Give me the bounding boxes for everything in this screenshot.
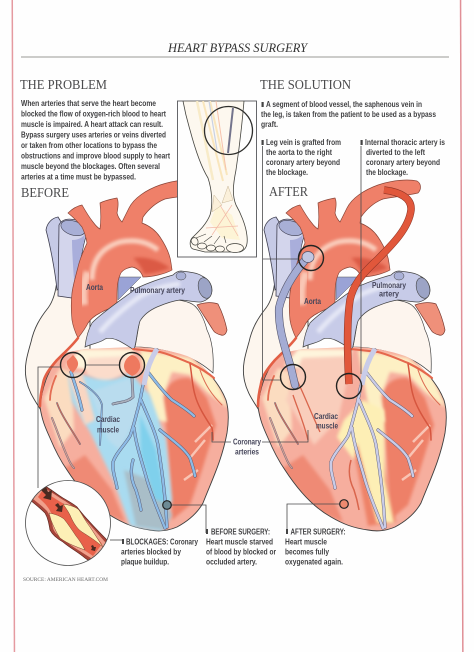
after: reoxygenated muscle [286, 356, 396, 526]
label: cardiac muscle before [96, 415, 120, 434]
blockage: blood-flow arrows [41, 487, 96, 551]
label: after surgery [285, 526, 346, 566]
text block: leg vein note: the blockage. [266, 167, 308, 177]
text block: problem description: When arteries that serve the heart become [21, 98, 156, 108]
label: cardiac muscle before: muscle [97, 426, 119, 434]
before: oxygen-starved blue zone [68, 356, 172, 532]
label: before surgery: Heart muscle starved [206, 536, 273, 546]
title: HEART BYPASS SURGERY [167, 41, 309, 55]
text block: internal thoracic artery note: coronary artery beyond [366, 157, 440, 167]
text block: internal thoracic artery note: diverted to the left [366, 147, 425, 157]
label: pulmonary artery after [372, 281, 406, 298]
text block: problem description: muscle is impaired. A heart attack can result. [21, 119, 163, 129]
label: cardiac muscle after: Cardiac [314, 412, 338, 421]
label: cardiac muscle after [314, 412, 338, 430]
heading: after: AFTER [269, 185, 309, 200]
heading: before: BEFORE [21, 186, 69, 201]
label: pulmonary artery after: Pulmonary [372, 281, 406, 290]
label: pulmonary artery after: artery [379, 290, 399, 298]
label: aorta after: Aorta [304, 297, 321, 306]
label: blockages: arteries blocked by [121, 546, 181, 556]
text block: leg vein note [262, 137, 341, 177]
label: after surgery: AFTER SURGERY: [290, 526, 346, 536]
text block: solution description: graft. [261, 119, 278, 129]
left page border line [12, 0, 15, 652]
magnifier circles: after grafts [280, 246, 362, 398]
blockage detail circle [26, 480, 110, 566]
label: after surgery: Heart muscle [285, 536, 327, 546]
label: coronary arteries: arteries [235, 448, 259, 456]
inset: toes [191, 234, 244, 252]
text block: problem description [21, 98, 170, 182]
label: after surgery: oxygenated again. [285, 556, 343, 566]
label: cardiac muscle after: muscle [316, 422, 338, 430]
label: after surgery: becomes fully [285, 546, 329, 556]
text block: internal thoracic artery note: Internal thoracic artery is [365, 137, 445, 147]
text block: problem description: or taken from other locations to bypass the [21, 140, 157, 150]
label: before surgery [206, 526, 276, 566]
source note: SOURCE: AMERICAN HEART.COM [23, 577, 108, 583]
before: blocked blue vessels [71, 350, 195, 528]
label: before surgery: of blood by blocked or [206, 546, 276, 556]
text block: internal thoracic artery note: the blockage. [366, 167, 408, 177]
graft: internal thoracic artery [348, 190, 411, 384]
graft: leg vein from aorta to right coronary [279, 252, 314, 385]
label: aorta before: Aorta [86, 283, 103, 292]
heart: after surgery [243, 180, 446, 531]
label: cardiac muscle before: Cardiac [96, 415, 120, 424]
inset: magnifier circle [204, 106, 252, 154]
text block: leg vein note: Leg vein is grafted from [266, 137, 341, 147]
heading: the problem: THE PROBLEM [20, 78, 107, 93]
label: blockages: BLOCKAGES: Coronary [126, 536, 198, 546]
text block: problem description: arteries at a time must be bypassed. [21, 172, 136, 182]
text block: problem description: Bypass surgery uses arteries or veins diverted [21, 130, 166, 140]
label: pulmonary artery before: Pulmonary artery [130, 286, 185, 295]
magnifier circles: before blockages [60, 352, 144, 378]
text block: leg vein note: the aorta to the right [266, 147, 332, 157]
label: coronary arteries [233, 438, 261, 456]
text block: problem description: muscle beyond the blockages. Often several [21, 161, 160, 171]
text block: leg vein note: coronary artery beyond [266, 157, 340, 167]
text block: internal thoracic artery note [360, 137, 445, 177]
label: before surgery: occluded artery. [206, 556, 257, 566]
right page border line [460, 0, 464, 652]
label: blockages [121, 536, 198, 566]
label: blockages: plaque buildup. [121, 556, 169, 566]
label: coronary arteries: Coronary [233, 438, 261, 446]
title rule [21, 56, 449, 58]
text block: problem description: blocked the flow of oxygen-rich blood to heart [21, 108, 166, 118]
text block: solution description [261, 99, 436, 129]
after: coronary vessels [331, 350, 413, 528]
text block: problem description: obstructions and improve blood supply to heart [21, 150, 170, 160]
heading: the solution: THE SOLUTION [260, 78, 351, 93]
leader lines [38, 146, 361, 540]
label: before surgery: BEFORE SURGERY: [211, 526, 270, 536]
marker: before muscle [163, 501, 171, 509]
heart: before surgery [25, 180, 228, 532]
marker: after muscle [340, 500, 348, 508]
text block: solution description: A segment of blood vessel, the saphenous vein in [266, 99, 422, 109]
inset: leg and foot with saphenous vein [178, 101, 256, 257]
